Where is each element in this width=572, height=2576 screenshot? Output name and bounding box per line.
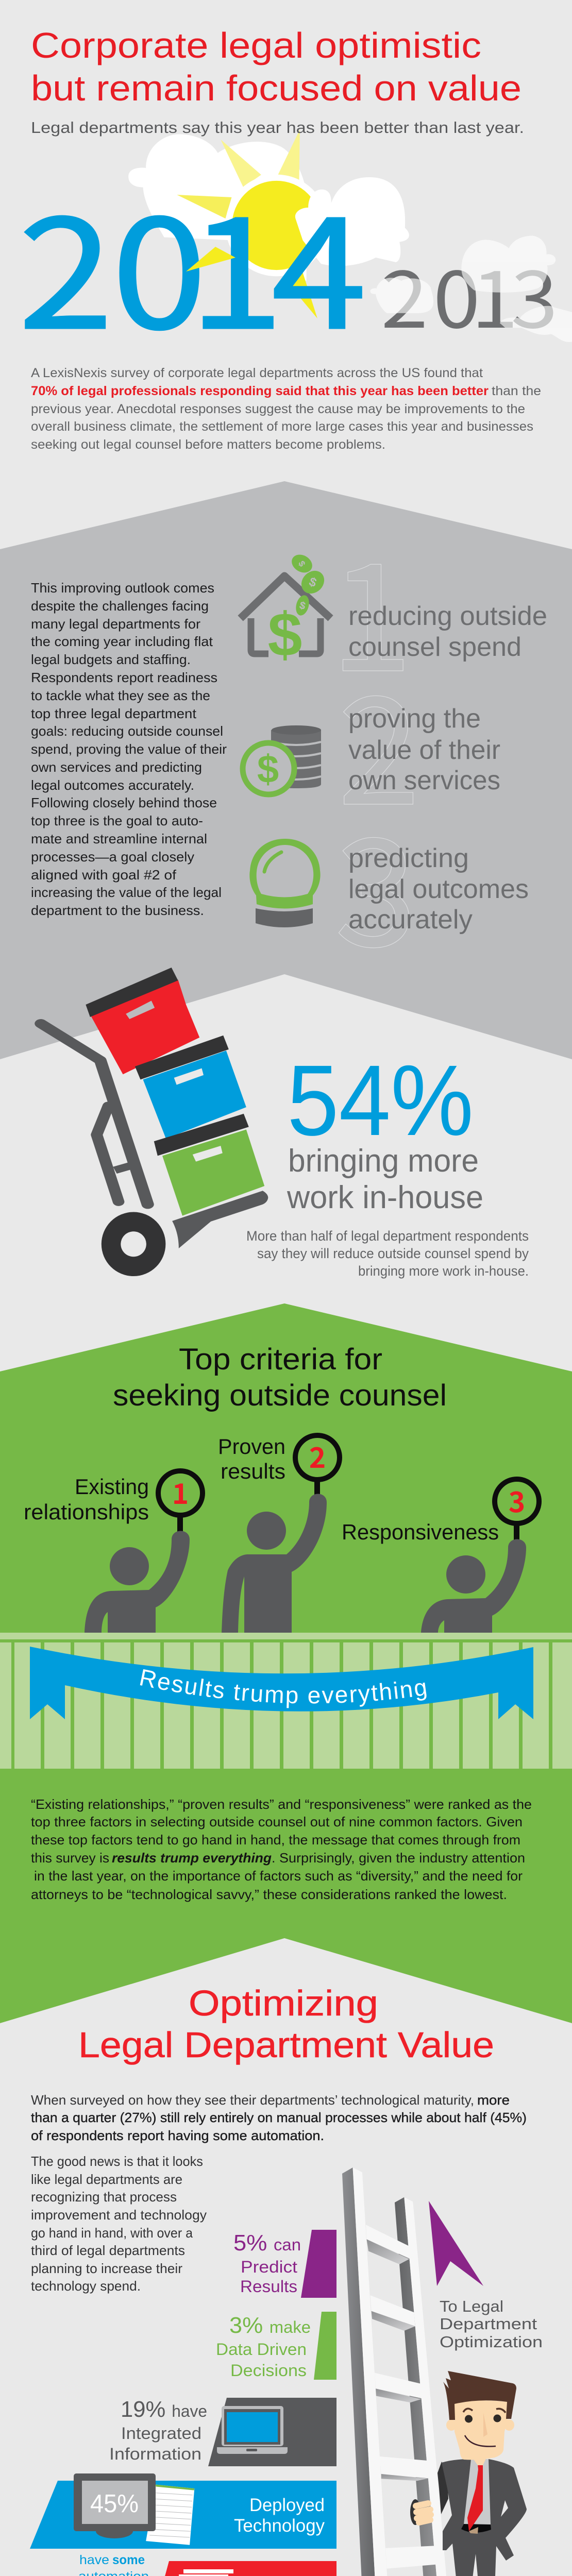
text block: existing relationships paragraph: results trump everything <box>112 1850 272 1866</box>
icon: coin stack with dollar coin: $ <box>257 748 279 791</box>
text block: improving outlook: legal outcomes accurately. <box>31 777 194 793</box>
text block: more than half <box>246 1228 529 1279</box>
bar: integrated information <box>208 2398 337 2466</box>
text block: good news: planning to increase their <box>31 2261 182 2276</box>
bar: manual processes <box>150 2561 337 2576</box>
text block: good news: The good news is that it looks <box>31 2154 203 2169</box>
label: predicting legal outcomes accurately: accurately <box>348 905 473 935</box>
intro paragraph: 70% of legal professionals responding said that this year has been better <box>31 384 489 398</box>
label: to legal department optimization: To Legal <box>440 2297 503 2315</box>
text block: technological maturity: more <box>477 2092 510 2108</box>
panel: green criteria section <box>0 1303 572 2023</box>
heading: top criteria: Top criteria for <box>179 1343 382 1376</box>
shirt <box>464 2459 491 2524</box>
label: to legal department optimization: Optimization <box>440 2333 543 2351</box>
text block: existing relationships paragraph: top three factors in selecting outside counsel out of nine common factors. Given <box>31 1814 523 1829</box>
eyes and mouth <box>463 2409 506 2447</box>
text block: existing relationships paragraph: attorneys to be “technological savvy,” these considerations ranked the lowest. <box>31 1887 507 1902</box>
illustration: sun and clouds behind the years <box>128 129 409 318</box>
text block: improving outlook: despite the challenges facing <box>31 598 209 614</box>
text block: existing relationships paragraph: these top factors tend to go hand in hand, the message that comes through from <box>31 1832 520 1848</box>
ears <box>446 2419 457 2431</box>
label: proven results <box>218 1434 285 1483</box>
label: to legal department optimization: Department <box>440 2315 537 2333</box>
stat label: bringing more work in-house: bringing more <box>288 1143 479 1179</box>
text block: existing relationships paragraph: “Existing relationships,” “proven results” and “responsiveness” were ranked as the <box>31 1797 532 1812</box>
text block: improving outlook: This improving outlook comes <box>31 580 214 596</box>
label: 3% make data driven decisions: Data Driven <box>216 2340 307 2359</box>
label: proven results: Proven <box>218 1434 285 1459</box>
heading: top criteria <box>113 1343 447 1412</box>
label: existing relationships: Existing <box>75 1475 149 1499</box>
text block: existing relationships paragraph: in the last year, on the importance of factors such as “diversity,” and the need for <box>34 1868 523 1884</box>
figure: person holding paddle 1 <box>85 1471 203 1633</box>
label: predicting legal outcomes accurately: predicting <box>348 843 469 873</box>
heading: title: Corporate legal optimistic <box>31 25 481 65</box>
face <box>455 2400 508 2460</box>
text block: technological maturity: When surveyed on how they see their departments’ technological maturity, <box>31 2092 474 2108</box>
text block: improving outlook: legal budgets and staffing. <box>31 652 191 667</box>
heading: title <box>31 25 521 108</box>
text block: existing relationships paragraph: this survey is <box>31 1850 109 1866</box>
label: 3% make data driven decisions: Decisions <box>230 2361 307 2380</box>
illustration: translucent clouds over 2013 <box>371 235 572 342</box>
label: 5% can predict results: Results <box>240 2277 297 2296</box>
label: have some automation <box>78 2553 149 2576</box>
label: existing relationships <box>24 1475 149 1524</box>
ghost number 3: 3 <box>334 773 417 989</box>
text block: improving outlook: department to the business. <box>31 903 204 918</box>
text block: technological maturity: than a quarter (27%) still rely entirely on manual processes while about half (45%) <box>31 2110 527 2125</box>
text block: improving outlook: the coming year including flat <box>31 634 213 649</box>
hand gripping ladder <box>410 2499 431 2525</box>
arrow: purple up arrow <box>429 2201 483 2286</box>
dark arm <box>438 2462 448 2514</box>
text block: improving outlook: increasing the value of the legal <box>31 885 222 900</box>
text block: more than half: More than half of legal department respondents <box>246 1228 529 1244</box>
panel: gray goals section <box>0 481 572 1059</box>
intro paragraph: overall business climate, the settlement of more large cases this year and businesses <box>31 419 533 434</box>
icon: monitor with 45%: 45% <box>90 2490 139 2518</box>
label: predicting legal outcomes accurately <box>348 843 529 935</box>
label: reducing outside counsel spend: reducing outside <box>348 601 547 631</box>
intro paragraph <box>31 366 541 452</box>
figure: person holding paddle 2: 2 <box>309 1435 326 1476</box>
text block: improving outlook: processes—a goal closely <box>31 849 194 865</box>
text block: good news: like legal departments are <box>31 2172 182 2187</box>
hand truck frame <box>41 1024 148 1205</box>
illustration: lower sun ray <box>186 247 235 272</box>
crotch <box>469 2527 478 2534</box>
text block: good news: improvement and technology <box>31 2207 207 2223</box>
label: proving the value of their own services: value of their <box>348 735 500 765</box>
stat label: bringing more work in-house: work in-house <box>287 1180 483 1215</box>
bar: deployed technology <box>30 2481 337 2549</box>
smaller year 2013: 2013 <box>381 239 558 350</box>
icon: house with dollar and coins <box>243 551 329 669</box>
label: proven results: results <box>221 1459 285 1483</box>
subtitle: Legal departments say this year has been better than last year. <box>31 118 524 137</box>
text block: existing relationships paragraph <box>31 1797 532 1902</box>
hair <box>443 2371 516 2420</box>
heading: optimizing legal department value: Legal Department Value <box>78 2025 494 2065</box>
banner: results trump everything <box>30 1647 533 1719</box>
text block: improving outlook: many legal departments for <box>31 616 200 632</box>
label: 3% make data driven decisions: 3% make <box>229 2313 311 2338</box>
label: responsiveness: Responsiveness <box>342 1520 499 1544</box>
text block: technological maturity: of respondents report having some automation. <box>31 2128 324 2143</box>
foot plate <box>172 1191 268 1248</box>
label: deployed technology <box>234 2495 325 2536</box>
text block: improving outlook <box>31 580 227 918</box>
figure: person holding paddle 2 <box>222 1435 340 1633</box>
text block: improving outlook: aligned with goal #2 of <box>31 867 177 883</box>
heading: top criteria: seeking outside counsel <box>113 1379 447 1412</box>
text block: improving outlook: Respondents report readiness <box>31 670 217 685</box>
label: have some automation: have <box>79 2553 109 2567</box>
blue box <box>135 1036 246 1139</box>
belt <box>461 2524 491 2533</box>
figure: person holding paddle 1: 1 <box>172 1471 189 1512</box>
illustration: hand truck with stacked boxes <box>41 968 268 1276</box>
illustration: ladder <box>342 2167 452 2576</box>
figure: businessman <box>410 2371 527 2576</box>
text block: good news: third of legal departments <box>31 2243 185 2258</box>
suit trousers and jacket <box>442 2459 527 2576</box>
text block: improving outlook: mate and streamline internal <box>31 831 207 846</box>
icon: laptop <box>217 2406 288 2454</box>
neck <box>472 2456 487 2465</box>
label: 5% can predict results: 5% can <box>233 2230 301 2256</box>
figure: person holding paddle 3 <box>421 1479 539 1633</box>
label: deployed technology: Deployed <box>249 2495 325 2515</box>
label: existing relationships: relationships <box>24 1500 149 1524</box>
text block: good news: go hand in hand, with over a <box>31 2225 193 2241</box>
text block: improving outlook: goals: reducing outside counsel <box>31 723 223 739</box>
text block: improving outlook: top three legal department <box>31 706 197 721</box>
text block: existing relationships paragraph: . Surprisingly, given the industry attention <box>272 1850 525 1866</box>
icon: paper sheet <box>146 2484 194 2545</box>
stat label: bringing more work in-house <box>287 1143 483 1215</box>
ghost number 1: 1 <box>330 498 413 714</box>
label: reducing outside counsel spend <box>348 601 547 662</box>
label: 5% can predict results <box>233 2230 301 2296</box>
text block: more than half: say they will reduce outside counsel spend by <box>257 1246 529 1261</box>
text block: technological maturity <box>31 2092 527 2143</box>
green box <box>154 1114 264 1216</box>
intro paragraph: previous year. Anecdotal responses suggest the cause may be improvements to the <box>31 402 525 416</box>
heading: title: but remain focused on value <box>31 68 521 108</box>
label: 19% have integrated information <box>109 2397 207 2463</box>
label: 19% have integrated information: Integrated <box>121 2424 201 2443</box>
banner: results trump everything: Results trump everything <box>140 1669 427 1708</box>
intro paragraph: seeking out legal counsel before matters become problems. <box>31 437 385 452</box>
label: 19% have integrated information: Information <box>109 2445 201 2463</box>
label: 5% can predict results: Predict <box>241 2258 297 2276</box>
icon: house with dollar and coins: $ <box>307 574 318 590</box>
label: 19% have integrated information: 19% have <box>121 2397 207 2422</box>
big year 2014: 2014 <box>18 154 366 372</box>
icon: crystal ball <box>249 839 321 927</box>
stat: 54%: 54% <box>287 1044 474 1157</box>
red box <box>86 968 199 1074</box>
label: proving the value of their own services <box>348 704 500 795</box>
text block: improving outlook: own services and predicting <box>31 759 202 775</box>
label: to legal department optimization <box>440 2297 543 2351</box>
text block: improving outlook: spend, proving the value of their <box>31 741 227 757</box>
bar: predict results <box>301 2230 337 2298</box>
icon: house with dollar and coins: $ <box>268 600 302 669</box>
text block: good news: technology spend. <box>31 2278 141 2294</box>
text block: improving outlook: Following closely behind those <box>31 795 217 810</box>
label: have some automation: some <box>112 2553 145 2567</box>
label: proving the value of their own services: proving the <box>348 704 481 734</box>
text block: more than half: bringing more work in-house. <box>358 1263 529 1279</box>
icon: coin stack with dollar coin <box>243 725 321 794</box>
tie <box>467 2465 483 2531</box>
label: reducing outside counsel spend: counsel spend <box>348 632 521 662</box>
icon: monitor with 45% <box>74 2473 156 2538</box>
heading: optimizing legal department value <box>78 1983 494 2065</box>
intro paragraph: than the <box>492 384 541 398</box>
label: proving the value of their own services: own services <box>348 766 500 795</box>
label: deployed technology: Technology <box>234 2516 325 2536</box>
icon: house with dollar and coins: $ <box>296 559 307 569</box>
fence rail and pickets <box>0 1633 572 1769</box>
label: predicting legal outcomes accurately: legal outcomes <box>348 874 529 904</box>
bar: data driven decisions <box>314 2312 337 2380</box>
icon: house with dollar and coins: $ <box>298 600 307 612</box>
text block: improving outlook: top three is the goal to auto- <box>31 813 203 828</box>
text block: good news <box>31 2154 207 2294</box>
text block: good news: recognizing that process <box>31 2189 177 2205</box>
wheel <box>102 1212 165 1276</box>
label: 3% make data driven decisions <box>216 2313 311 2380</box>
figure: person holding paddle 3: 3 <box>509 1479 525 1520</box>
text block: improving outlook: to tackle what they see as the <box>31 688 210 703</box>
ghost number 2: 2 <box>338 631 420 848</box>
heading: optimizing legal department value: Optimizing <box>189 1983 378 2023</box>
icon: paper stack <box>178 2569 233 2576</box>
intro paragraph: A LexisNexis survey of corporate legal departments across the US found that <box>31 366 483 380</box>
